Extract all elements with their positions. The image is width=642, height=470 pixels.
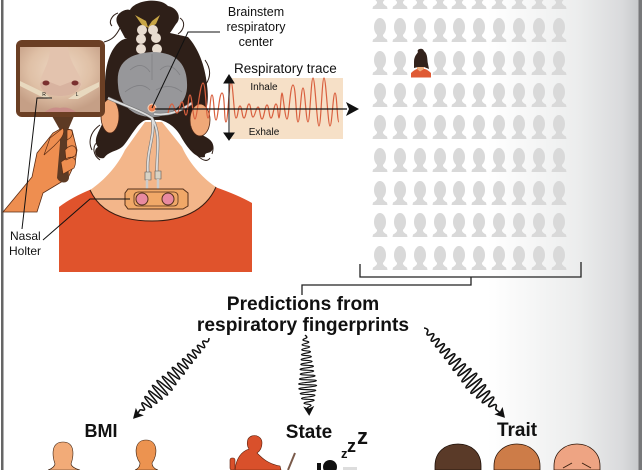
time axis arrow	[155, 108, 347, 110]
trait: medium face	[494, 444, 540, 470]
squiggle arrow to Trait	[417, 322, 512, 424]
label: Trait: Trait	[497, 420, 538, 441]
brain folds	[125, 54, 182, 92]
fingers	[61, 130, 76, 174]
state: person at laptop	[230, 436, 295, 470]
thumb	[44, 128, 64, 155]
amplitude arrow	[224, 75, 234, 140]
label: nasal holter: Holter	[9, 244, 41, 258]
tube connectors	[145, 171, 161, 180]
nasal tubes outline	[108, 98, 192, 173]
bracket over crowd	[360, 262, 581, 277]
frame left edge	[1, 0, 4, 470]
mirror with nose view: L	[76, 92, 79, 98]
sleeper head	[323, 460, 337, 470]
squiggle arrow to State	[296, 335, 318, 416]
trace wave	[168, 78, 339, 126]
trait: worried brows	[563, 463, 591, 468]
state: sleep letters: z	[347, 436, 356, 456]
hand holding mirror	[3, 128, 77, 212]
respiratory trace chart	[155, 61, 359, 140]
hair	[95, 33, 213, 158]
label: brainstem respiratory center: respiratory	[226, 20, 286, 34]
illustration: woman with nasal holter	[59, 1, 252, 272]
heading: predictions: respiratory fingerprints	[197, 315, 409, 336]
beads	[136, 25, 162, 54]
BMI person: slimmer	[135, 440, 158, 470]
shirt	[59, 187, 252, 272]
nose shape	[40, 47, 82, 96]
loose curls	[90, 13, 213, 160]
brainstem marker	[148, 104, 156, 112]
neck and back skin	[90, 122, 216, 221]
state: sleep letters: z	[357, 424, 368, 449]
connector to predictions	[302, 277, 471, 295]
heading: predictions: Predictions from	[227, 294, 379, 315]
trait: dark face	[435, 444, 481, 470]
leader line: nasal	[22, 98, 52, 229]
hair bun	[116, 1, 179, 38]
mirror handle	[52, 116, 74, 182]
nasal tubes	[108, 98, 192, 173]
label: nasal holter: Nasal	[10, 229, 41, 243]
state: sleeping person	[317, 460, 357, 470]
brain	[118, 52, 187, 117]
chair back	[230, 458, 235, 470]
state: sleep letters	[341, 424, 368, 461]
laptop screen	[288, 453, 295, 470]
highlighted participant	[411, 49, 431, 78]
trace title: Respiratory trace	[234, 61, 337, 76]
inhale label: Inhale	[250, 82, 278, 93]
nasal cannula	[20, 81, 99, 99]
collar line	[90, 187, 216, 221]
nasal holter device	[125, 189, 188, 209]
crowd of silhouettes	[372, 0, 566, 270]
label: brainstem respiratory center: Brainstem	[228, 5, 284, 19]
frame right edge	[638, 0, 642, 470]
leader line: holter	[43, 199, 130, 240]
state: sleep letters: z	[341, 446, 348, 461]
label: State: State	[286, 422, 332, 443]
pillow	[343, 467, 357, 470]
seated figure	[235, 436, 281, 470]
BMI person: larger	[48, 442, 80, 470]
trace background	[230, 78, 343, 139]
hair ornament	[135, 15, 160, 28]
lips	[45, 108, 76, 112]
leader line: brainstem	[152, 32, 220, 108]
squiggle arrow to BMI	[127, 332, 215, 425]
mirror glass	[20, 47, 100, 112]
mirror with nose view	[3, 40, 105, 212]
time arrowhead	[346, 102, 359, 116]
label: BMI: BMI	[84, 421, 118, 441]
mirror frame	[16, 40, 105, 117]
headboard	[317, 463, 321, 470]
nostrils	[42, 80, 78, 86]
ears	[101, 99, 210, 136]
exhale label: Exhale	[249, 127, 280, 138]
label: brainstem respiratory center: center	[239, 35, 273, 49]
tube ends	[147, 179, 158, 191]
nose base	[40, 81, 81, 96]
R and L labels: R	[42, 92, 46, 98]
trait: light face	[554, 444, 600, 470]
